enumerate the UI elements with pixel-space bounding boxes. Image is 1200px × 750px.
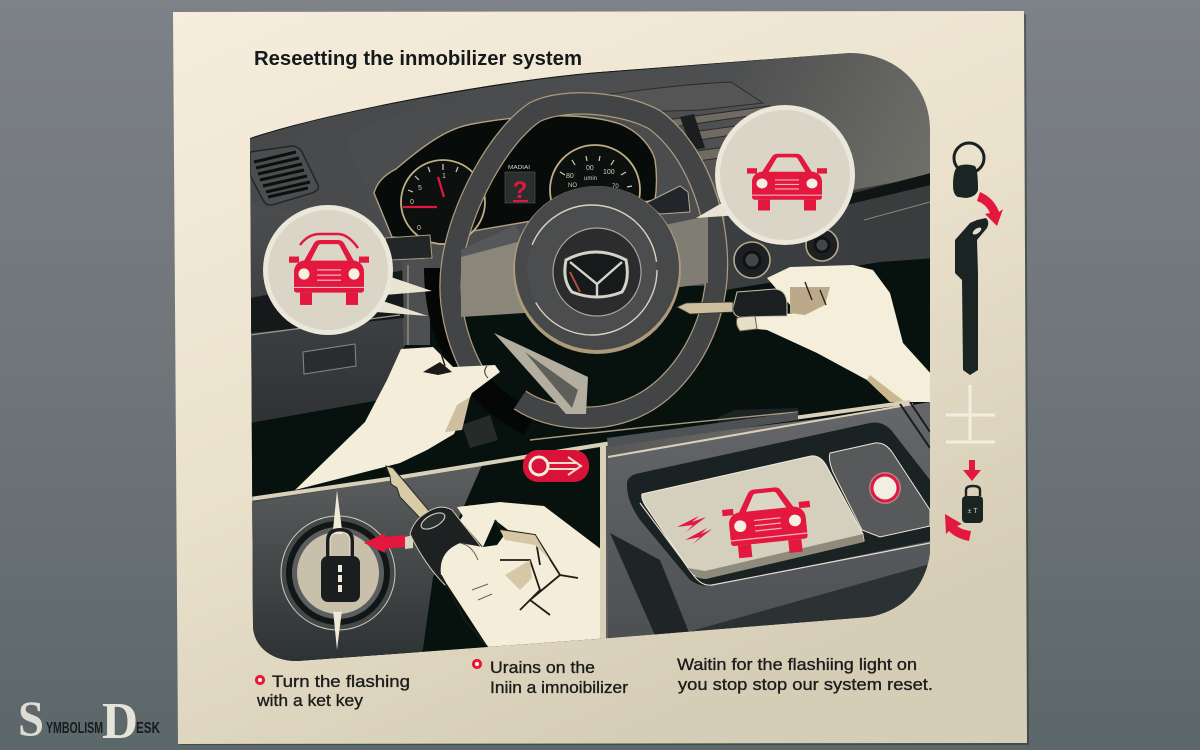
- hand: gripping wheel: [295, 347, 500, 490]
- divider band: [250, 402, 910, 499]
- right gauge: 80: [566, 173, 574, 180]
- red key badge: [523, 450, 589, 482]
- caption: step 1: with a ket key: [256, 691, 364, 710]
- decorative key cross mark: [946, 385, 995, 442]
- red insertion arrow: [364, 533, 405, 553]
- left vent: [250, 146, 318, 205]
- right gauge: 100: [603, 169, 615, 176]
- wheel spokes: [461, 242, 525, 317]
- warning indicator: ?: [513, 177, 527, 204]
- right gauge: umin: [584, 176, 597, 182]
- red corner arrow: [945, 514, 971, 541]
- instrument cluster: [374, 116, 656, 244]
- ignition lock: [281, 490, 395, 650]
- right gauge: 70: [612, 184, 619, 190]
- dashboard base: [245, 50, 935, 670]
- caption: step 3: Waitin for the flashiing light on: [677, 655, 917, 674]
- caption: step 2: [473, 659, 629, 697]
- right gauge: [549, 144, 641, 200]
- key fob: [733, 289, 787, 317]
- key silhouette: [955, 218, 988, 375]
- left gauge: 5: [418, 185, 422, 192]
- small padlock: [966, 486, 980, 496]
- fob: [953, 164, 978, 198]
- callout: right car warning: [715, 105, 855, 245]
- large car button: [642, 456, 864, 579]
- instrument hood: [656, 136, 700, 220]
- steering wheel: [437, 103, 717, 424]
- fob ring: [954, 143, 984, 173]
- logo: Symbolism Desk: ESK: [136, 720, 160, 737]
- right gauge: NO: [568, 183, 577, 189]
- left gauge: 1: [442, 173, 446, 180]
- right knobs panel: [725, 216, 804, 290]
- sidebar: lock diagram: ± T: [968, 508, 978, 515]
- right gauge: 00: [586, 165, 594, 172]
- caption: step 2: Iniin a imnoibilizer: [490, 679, 629, 697]
- callout pointers: [376, 200, 740, 316]
- knob right: [806, 229, 838, 261]
- pedals: [462, 415, 498, 448]
- warning indicator: [505, 165, 535, 204]
- car emblem: [565, 252, 627, 297]
- caption: step 3: you stop stop our system reset.: [678, 675, 933, 694]
- panel: step 1 insert key: [250, 402, 910, 670]
- left gauge: [401, 160, 485, 244]
- upper right dash shade: [847, 182, 930, 266]
- caption: step 2: Urains on the: [490, 659, 595, 677]
- sidebar: key removal diagram: [953, 143, 1003, 375]
- glovebox handle: [303, 344, 356, 374]
- right vents: [671, 105, 770, 161]
- sidebar: lock diagram: [945, 460, 983, 541]
- caption: step 1: [256, 672, 410, 710]
- logo: Symbolism Desk: D: [102, 693, 138, 750]
- padlock: [321, 530, 360, 602]
- key blade: [677, 302, 733, 314]
- turn signal stalk: [385, 235, 432, 260]
- step 2 background: [608, 402, 930, 670]
- left gauge: 0: [417, 225, 421, 232]
- logo: Symbolism Desk: YMBOLISM: [46, 720, 103, 737]
- panel: main dashboard illustration: [245, 50, 935, 670]
- red curved arrow: [977, 192, 1003, 226]
- indicator button: [829, 443, 930, 537]
- left gauge: 0: [410, 199, 414, 206]
- footwell black: [250, 258, 935, 500]
- button recess: [627, 422, 930, 586]
- red down arrow: [963, 460, 981, 481]
- panel: step 2 flashing light: [603, 402, 930, 670]
- steering hub: [513, 186, 681, 354]
- lower console strip: [717, 408, 800, 423]
- red car with flash marks: [720, 484, 815, 560]
- step 1 background: [250, 447, 602, 670]
- paper poster: [173, 11, 1029, 745]
- title: Reseetting the inmobilizer system: [254, 48, 582, 70]
- lower key blade: [386, 466, 430, 518]
- lower key fob: [410, 507, 482, 585]
- caption: step 3: [677, 655, 933, 694]
- knob left: [734, 242, 770, 278]
- lower left dash: [250, 205, 405, 425]
- callout: left car warning: [263, 205, 393, 335]
- lower hand: [441, 502, 602, 650]
- caption: step 1: Turn the flashing: [272, 672, 410, 691]
- warning indicator: MADIAI: [508, 165, 531, 171]
- inset dark band bottom: [610, 533, 690, 640]
- logo: Symbolism Desk: S: [18, 690, 44, 746]
- hand: holding key fob: [677, 265, 932, 402]
- logo: Symbolism Desk: [18, 690, 160, 750]
- right column stalk: [642, 186, 690, 214]
